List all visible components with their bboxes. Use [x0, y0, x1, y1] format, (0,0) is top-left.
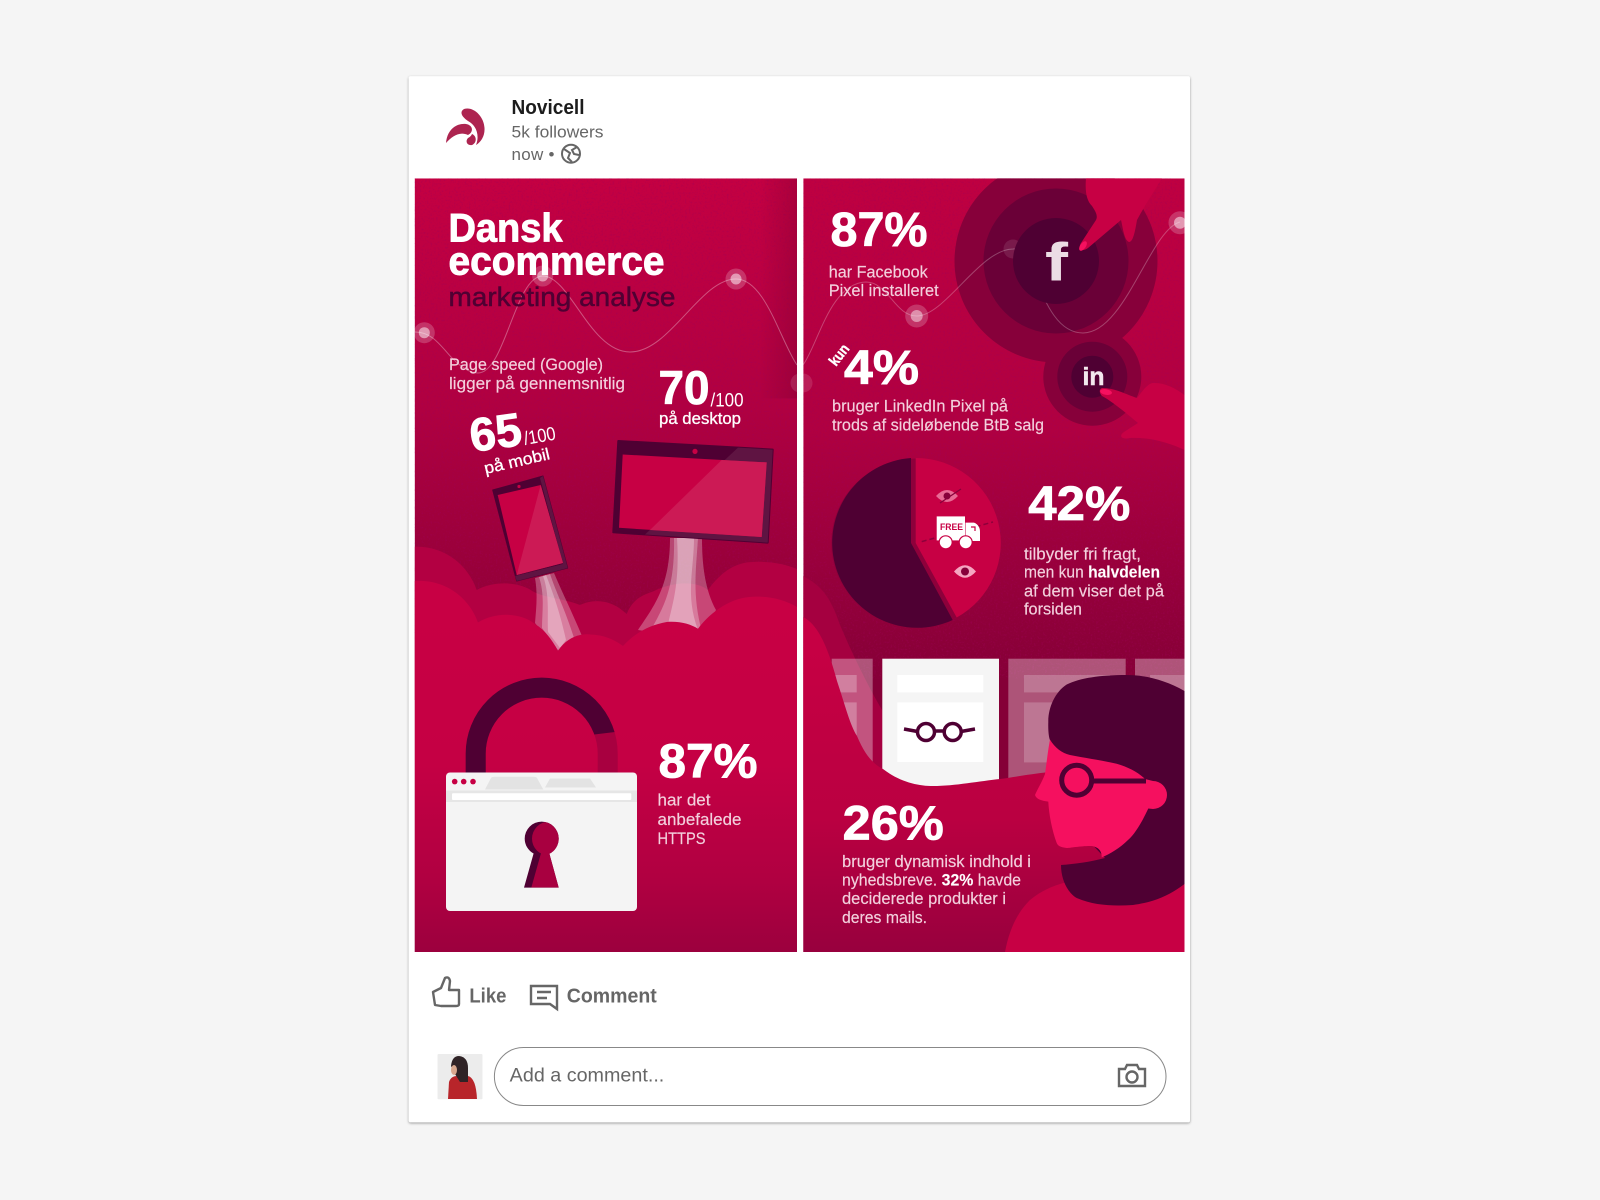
icon: tablet — [613, 441, 773, 543]
stat: https 87%: 87% — [658, 736, 758, 788]
title: ecommerce — [448, 240, 664, 284]
title: marketing analyse — [448, 282, 676, 312]
linkedin post infographic — [407, 76, 1192, 1125]
front clouds — [415, 581, 797, 952]
stat: free shipping 42%: forsiden — [1024, 601, 1082, 619]
icon: thumbs up — [433, 977, 459, 1006]
comment input — [494, 1048, 1166, 1106]
page speed intro: ligger på gennemsnitlig — [449, 375, 625, 393]
stat: desktop 70/100: 70 — [658, 361, 710, 414]
panel: right — [794, 160, 1192, 952]
stat: dynamic content 26%: bruger dynamisk indhold i — [842, 853, 1031, 871]
stat: free shipping 42%: 42% — [1028, 478, 1130, 531]
panel: left — [414, 178, 810, 952]
front wave — [803, 617, 1105, 952]
hand pointing at linkedin — [1100, 383, 1184, 450]
facebook target circles — [954, 160, 1158, 362]
icon: crossed eye — [936, 489, 961, 503]
icon: facebook — [1013, 218, 1099, 304]
action bar — [433, 977, 657, 1009]
comment row — [438, 1048, 1166, 1106]
stat: mobile 65/100: på mobil — [482, 445, 552, 478]
keyhole — [524, 822, 559, 888]
hair — [1048, 675, 1184, 905]
icon: globe — [562, 145, 580, 163]
person shoulder — [1005, 870, 1184, 952]
padlock shackle — [476, 688, 608, 775]
hand pointing at facebook — [1078, 178, 1162, 252]
timestamp: now • — [512, 145, 555, 164]
stat: desktop 70/100 — [660, 370, 743, 428]
stat: free shipping 42% — [1024, 478, 1165, 619]
face — [1035, 740, 1167, 857]
stat: free shipping 42%: men kun halvdelen — [1024, 564, 1160, 582]
stat: https 87%: anbefalede — [658, 811, 742, 829]
icon: phone — [493, 476, 568, 581]
tablet light stream — [638, 538, 716, 640]
stat: mobile 65/100 — [470, 412, 555, 478]
stat: dynamic content 26% — [842, 798, 1031, 927]
like label: Like — [469, 986, 506, 1008]
page speed intro — [449, 356, 625, 393]
browser window lock — [446, 772, 637, 911]
stat: linkedin 4%: bruger LinkedIn Pixel på — [832, 398, 1009, 416]
line nodes — [794, 211, 1192, 392]
stat: facebook 87% — [830, 212, 939, 296]
post card — [409, 76, 1190, 1122]
stat: free shipping 42%: tilbyder fri fragt, — [1024, 546, 1141, 564]
icon: camera — [1119, 1065, 1145, 1086]
stat: linkedin 4%: kun — [826, 341, 853, 369]
icon: facebook: f — [1045, 233, 1069, 293]
stat: desktop 70/100: /100 — [710, 390, 744, 412]
header: company — [446, 97, 604, 164]
title: Dansk — [448, 206, 563, 250]
stat: desktop 70/100: på desktop — [659, 410, 741, 428]
followers: 5k followers — [512, 123, 604, 142]
icon: eye — [954, 565, 976, 578]
monocle — [1062, 765, 1146, 795]
icon: novicell logo — [446, 108, 485, 145]
icon: free truck — [937, 516, 980, 549]
page speed intro: Page speed (Google) — [449, 356, 603, 374]
line nodes — [414, 266, 810, 392]
icon: free truck: FREE — [940, 522, 963, 533]
company name: Novicell — [512, 97, 584, 119]
stat: dynamic content 26%: 26% — [843, 798, 944, 850]
back clouds — [415, 547, 797, 700]
stat: facebook 87%: Pixel installeret — [829, 282, 939, 300]
stat: https 87%: HTTPS — [658, 830, 706, 848]
avatar — [438, 1054, 482, 1099]
stat: mobile 65/100: 65 — [466, 402, 525, 462]
icon: linkedin: in — [1082, 363, 1104, 391]
dashed divider — [922, 522, 993, 542]
wave line — [415, 276, 797, 373]
comment label: Comment — [567, 986, 657, 1008]
newsletter page centre — [882, 659, 999, 789]
stat: linkedin 4%: trods af sideløbende BtB salg — [832, 417, 1044, 435]
icon: glasses — [904, 724, 975, 740]
stat: mobile 65/100: /100 — [522, 424, 557, 450]
phone light stream — [535, 573, 582, 652]
person with monocle — [1035, 675, 1184, 905]
stat: dynamic content 26%: deciderede produkter i — [842, 890, 1006, 908]
stat: https 87% — [658, 744, 757, 844]
stat: https 87%: har det — [658, 792, 711, 810]
stat: linkedin 4% — [826, 341, 1044, 435]
stat: facebook 87%: 87% — [830, 204, 928, 257]
back wave — [803, 576, 885, 800]
placeholder: Add a comment... — [510, 1066, 664, 1087]
icon: comment — [531, 986, 557, 1009]
title — [448, 206, 676, 312]
wave line — [803, 222, 1180, 365]
stat: linkedin 4%: 4% — [844, 342, 919, 395]
newsletter pages faded — [832, 659, 1185, 789]
stat: facebook 87%: har Facebook — [829, 263, 928, 281]
stat: free shipping 42%: af dem viser det på — [1024, 583, 1165, 601]
stat: dynamic content 26%: nyhedsbreve. 32% havde — [842, 871, 1021, 889]
stat: dynamic content 26%: deres mails. — [842, 909, 927, 927]
pie chart — [831, 458, 1001, 628]
linkedin target circles — [1043, 328, 1141, 426]
